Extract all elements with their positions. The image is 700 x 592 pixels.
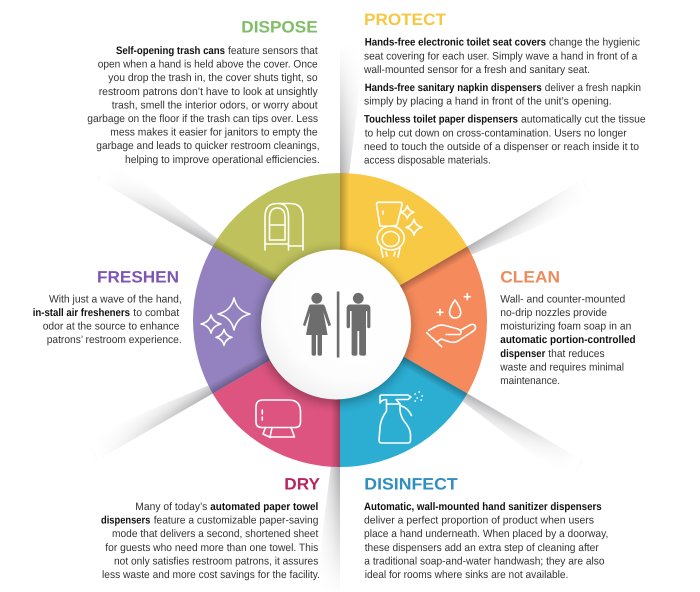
text block: dispose [87, 45, 320, 166]
text block: dry: not only satisfies restroom patrons, it assures [114, 555, 319, 567]
text block: dispose: mess makes it easier for janitors to empty the [110, 127, 318, 139]
panel: protect [363, 11, 646, 167]
text block: dispose: garbage on the floor if the trash can tips over. Less [87, 113, 319, 125]
text block: clean: that reduces [548, 348, 605, 360]
text block: dispose: open when a hand is held above the cover. Once [98, 59, 318, 71]
icon: spray bottle [379, 392, 422, 443]
panel: clean [499, 269, 636, 387]
text block: freshen: With just a wave of the hand, [49, 293, 182, 305]
divider [337, 292, 339, 358]
heading: protect: PROTECT [364, 11, 446, 29]
text block: clean: dispenser [500, 348, 546, 360]
text block: clean: waste and requires minimal [499, 361, 624, 373]
woman [303, 293, 331, 356]
icon: trash can [265, 204, 303, 250]
segment: clean [340, 246, 487, 394]
text block: clean: moisturizing foam soap in an [500, 321, 631, 333]
icon: toilet with sparkles [377, 202, 422, 257]
text block: protect: to help cut down on cross-contamination. Users no longer [365, 127, 627, 139]
text block: dispose: restroom patrons don’t have to look at unsightly [99, 86, 318, 98]
text block: protect: Touchless toilet paper dispensers [364, 114, 518, 126]
text block: dry: automated paper towel [210, 501, 318, 513]
text block: dispose: helping to improve operational efficiencies. [125, 154, 320, 166]
text block: dry: less waste and more cost savings for the facility. [102, 569, 320, 581]
text block: dispose: feature sensors that [228, 45, 318, 57]
text block: disinfect [364, 501, 608, 581]
text block: disinfect: ideal for rooms where sinks are not available. [365, 569, 568, 581]
text block: protect: seat covering for each user. Simply wave a hand in front of a [364, 50, 637, 62]
icon: paper towel dispenser [256, 400, 300, 438]
icon: hand with soap drop [427, 294, 476, 347]
text block: protect: automatically cut the tissue [521, 114, 646, 126]
color wheel [193, 170, 487, 470]
text block: protect: Hands-free sanitary napkin dispensers [365, 82, 542, 94]
segment: freshen [193, 246, 340, 394]
text block: protect: deliver a fresh napkin [545, 82, 641, 94]
text block: freshen: to combat [133, 307, 179, 319]
text block: freshen: in-stall air fresheners [33, 307, 130, 319]
text block: protect: access disposable materials. [364, 155, 491, 167]
text block: protect: Hands-free electronic toilet seat covers [365, 37, 546, 49]
text block: protect [363, 37, 646, 167]
man [347, 293, 370, 356]
panel: dispose [87, 19, 320, 166]
icon: restroom people [303, 292, 370, 358]
text block: freshen: odor at the source to enhance [43, 321, 179, 333]
text block: clean: no-drip nozzles provide [500, 307, 607, 319]
text block: dispose: trash, smell the interior odors, or worry about [112, 99, 318, 111]
heading: disinfect: DISINFECT [364, 475, 458, 493]
text block: dry: Many of today’s [135, 501, 208, 513]
heading: dispose: DISPOSE [241, 19, 318, 37]
text block: protect: change the hygienic [549, 37, 641, 49]
text block: clean: maintenance. [500, 375, 560, 387]
segment: dispose [213, 173, 340, 320]
text block: protect: need to touch the outside of a dispenser or reach inside it to [364, 141, 639, 153]
text block: dispose: garbage and leads to quicker restroom cleanings, [96, 140, 320, 152]
segment: protect [340, 173, 467, 320]
text block: dry [101, 501, 320, 581]
text block: dispose: Self-opening trash cans [116, 45, 225, 57]
segment: disinfect [340, 320, 467, 467]
heading: freshen: FRESHEN [97, 269, 179, 287]
text block: freshen: patrons’ restroom experience. [47, 334, 182, 346]
text block: disinfect: deliver a perfect proportion of product when users [364, 515, 595, 527]
text block: disinfect: place a hand underneath. When placed by a doorway, [364, 528, 608, 540]
text block: dry: for guests who need more than one towel. This [105, 542, 319, 554]
icon: sparkles [201, 298, 250, 345]
text block: dry: dispensers [101, 515, 150, 527]
text block: dispose: you drop the trash in, the cover shuts tight, so [108, 72, 318, 84]
heading: dry: DRY [284, 475, 320, 493]
text block: protect: wall-mounted sensor for a fresh and sanitary seat. [363, 64, 590, 76]
text block: disinfect: Automatic, wall-mounted hand sanitizer dispensers [364, 501, 602, 513]
center hub [261, 250, 411, 400]
panel: disinfect [364, 475, 608, 581]
segment: dry [213, 320, 340, 467]
text block: disinfect: these dispensers add an extra step of cleaning after [365, 542, 599, 554]
text block: clean [499, 293, 636, 387]
panel: dry [101, 475, 320, 581]
text block: disinfect: a traditional soap-and-water handwash; they are also [364, 555, 605, 567]
heading: clean: CLEAN [500, 269, 560, 287]
text block: clean: automatic portion-controlled [500, 334, 636, 346]
text block: dry: feature a customizable paper-saving [154, 515, 318, 527]
panel: freshen [33, 269, 182, 346]
text block: clean: Wall- and counter-mounted [500, 293, 625, 305]
text block: protect: simply by placing a hand in front of the unit’s opening. [364, 96, 612, 108]
text block: freshen [33, 293, 182, 346]
text block: dry: mode that delivers a second, shortened sheet [112, 528, 318, 540]
